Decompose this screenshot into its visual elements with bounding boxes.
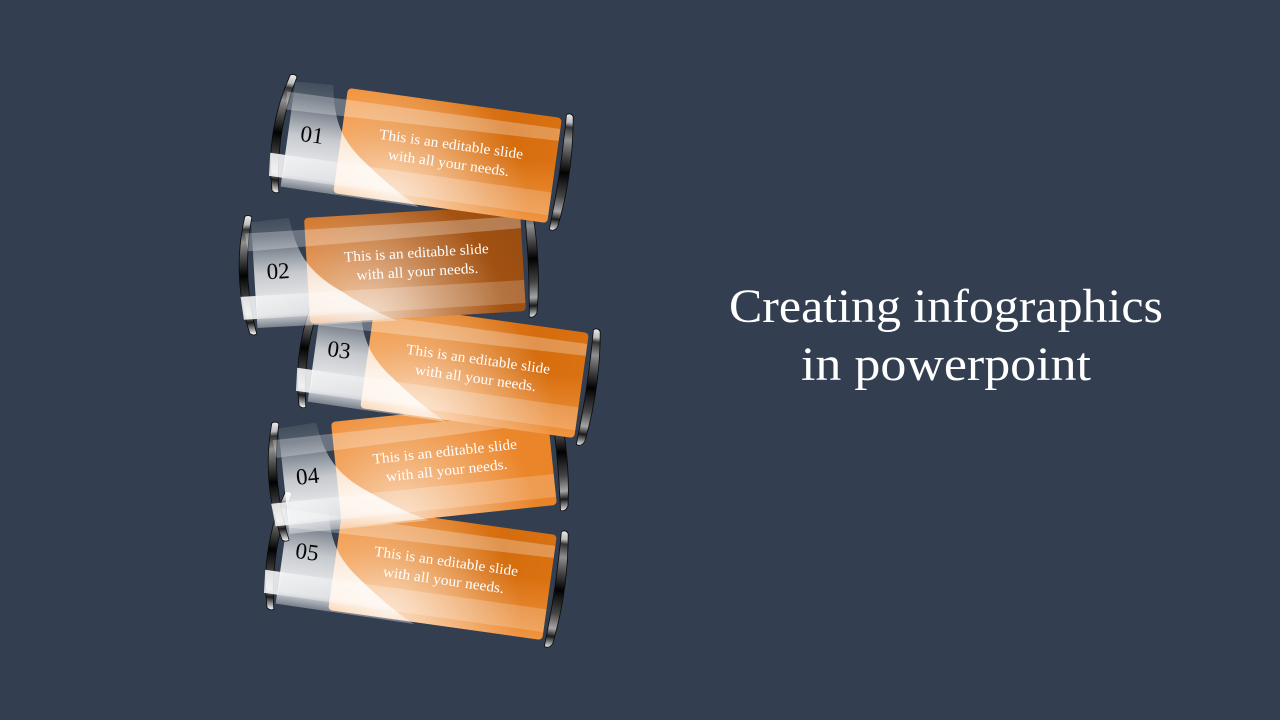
left cap [263,422,291,542]
glass reflection [307,295,461,422]
top band [284,91,560,148]
glass reflection [251,212,397,329]
orange panel [328,505,557,640]
panel highlight [304,205,526,324]
panel glow [333,88,562,223]
top band [245,216,521,252]
right cap [549,113,577,232]
panel text: This is an editable slide [378,127,524,163]
bottom band [241,280,525,320]
right cap [548,393,572,511]
panel text: This is an editable slide [373,544,519,580]
panel highlight [360,303,589,438]
left cap [236,215,259,336]
left cap [260,490,292,610]
top band [272,410,549,458]
number: 02 [266,258,290,284]
panel text: This is an editable slide [343,241,489,266]
glass reflection [278,412,429,535]
bottom band [267,153,551,215]
top band [279,508,555,565]
orange panel [360,303,589,438]
glass reflection [280,80,434,207]
battery 04 [263,392,573,542]
left cap [265,73,297,193]
battery 03 [292,288,605,448]
orange panel [304,205,526,324]
orange panel [331,399,557,527]
bottom band [294,368,578,430]
panel text: This is an editable slide [405,342,551,378]
number: 04 [295,463,321,490]
number: 01 [299,121,325,149]
battery 05 [260,490,573,650]
glass reflection [275,497,429,624]
panel text line 2: with all your needs. [385,457,508,486]
right cap [544,530,572,649]
panel text line 2: with all your needs. [382,564,505,597]
panel glow [328,505,557,640]
orange panel [333,88,562,223]
top band [311,306,587,363]
right cap [576,328,604,447]
title: in powerpoint [801,338,1092,391]
panel highlight [333,88,562,223]
title [729,280,1163,391]
panel text line 2: with all your needs. [414,362,537,395]
panel glow [360,303,589,438]
left cap [292,288,324,408]
bottom band [271,474,556,527]
battery 01 [265,73,578,233]
panel text: This is an editable slide [372,437,518,468]
title: Creating infographics [729,280,1163,333]
panel highlight [328,505,557,640]
right cap [522,199,541,317]
battery 02 [236,199,541,336]
panel text line 2: with all your needs. [387,147,510,180]
panel highlight [331,399,557,527]
bottom band [262,570,546,632]
number: 03 [326,336,352,364]
number: 05 [294,538,320,566]
panel text line 2: with all your needs. [356,261,479,284]
